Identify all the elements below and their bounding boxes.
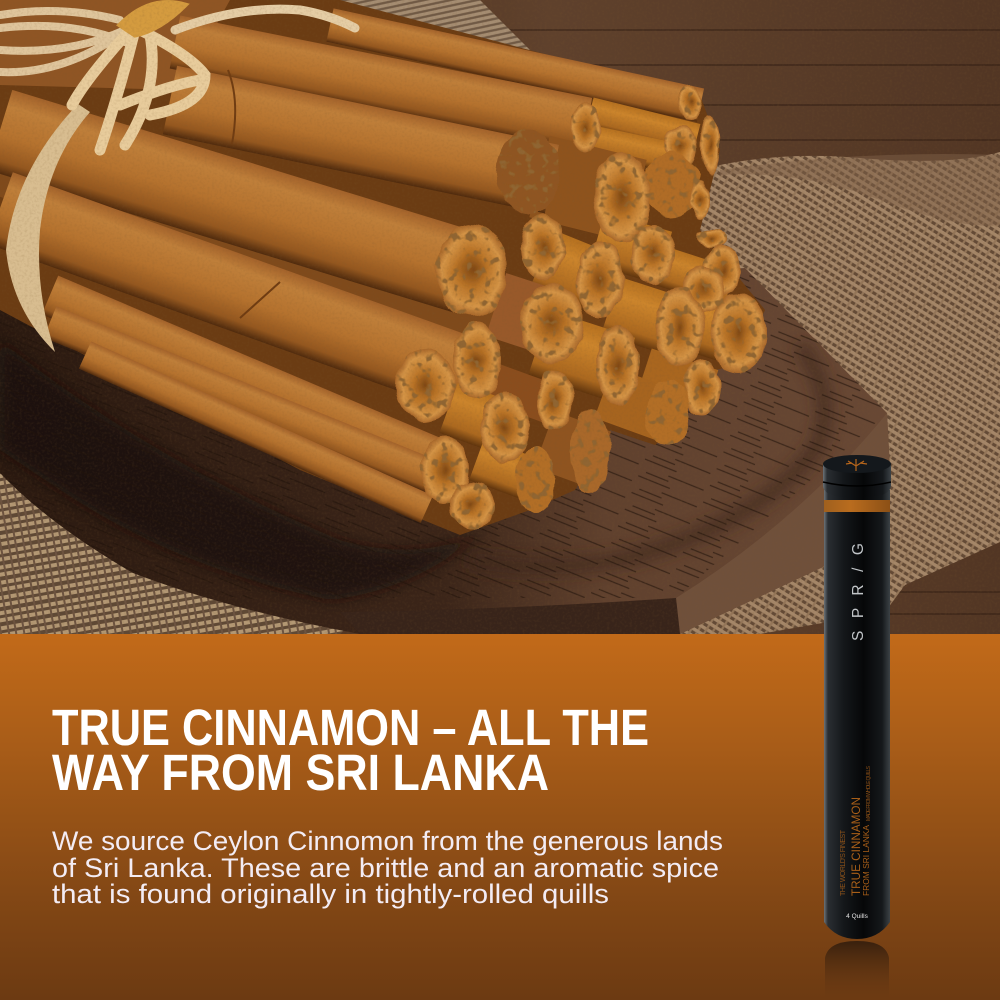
quill ends, inner cluster [481,86,766,512]
body text: of Sri Lanka. These are brittle and an aromatic spice [52,853,719,883]
tube reflection [825,941,889,1000]
body text [52,826,723,909]
heading: TRUE CINNAMON – ALL THE [52,699,649,756]
orange band [824,500,890,512]
body text: We source Ceylon Cinnomon from the generous lands [52,826,723,856]
tube cap [823,455,891,498]
photo: cinnamon bundle on wooden tray [0,0,1000,634]
main long quills [0,66,559,523]
wooden tray [0,268,890,634]
tray front face [676,413,890,634]
burlap cloth, bottom left [0,465,350,634]
bottom orange gradient panel [0,634,1000,1000]
quill ends, front [395,130,560,529]
cinnamon bundle [0,0,766,535]
body text: that is found originally in tightly-rolled quills [52,879,609,909]
tube body [824,490,890,939]
top-left quills behind the raffia [0,0,230,90]
raffia tie [0,2,355,352]
product tube: SPRIG true cinnamon [823,455,891,1000]
left dark well [0,340,490,600]
label text [840,765,872,896]
shadow mass behind the quills [0,0,765,535]
quill stubs, inner cluster [440,138,728,498]
raffia band [6,104,90,352]
brand name: S P R / G [850,543,867,641]
back quills [0,8,704,363]
quantity label: 4 Quills [846,913,869,920]
tray front lip [468,598,680,634]
heading: WAY FROM SRI LANKA [52,744,549,801]
label text: THE WORLD'S FINEST [840,829,847,896]
heading [52,699,649,801]
label text: TRUE CINNAMON [849,797,863,896]
raffia strands [0,2,355,150]
right well shadow [470,345,825,566]
label text: FROM SRI LANKA [861,825,871,896]
tree logo [846,459,867,471]
label text: MADE FROM WHOLE QUILLS [866,765,872,821]
photo grain [0,0,1000,634]
wooden table background [340,0,1000,634]
burlap cloth, right [680,152,1000,634]
burlap cloth, top [340,0,530,50]
